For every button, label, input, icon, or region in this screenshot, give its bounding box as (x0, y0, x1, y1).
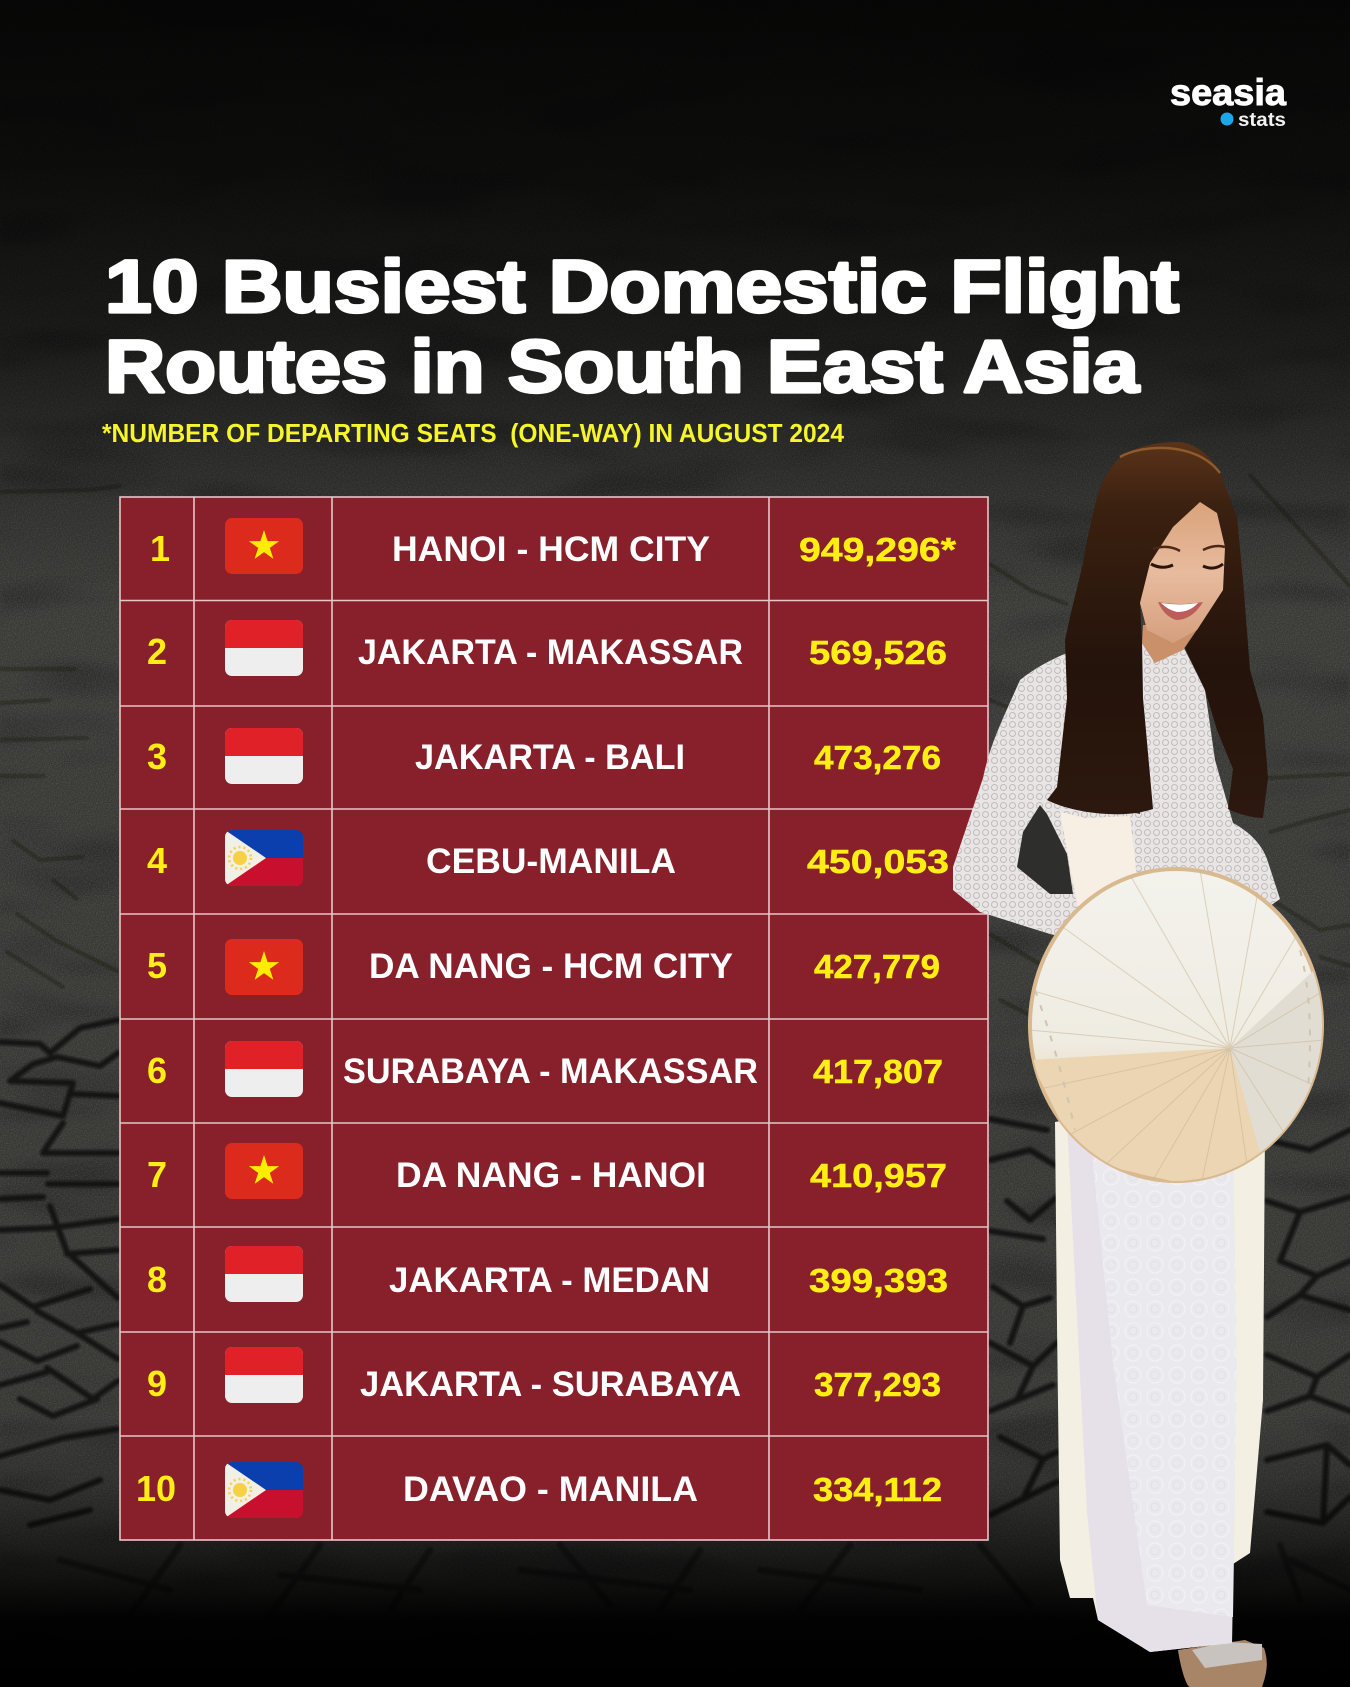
subtitle: *NUMBER OF DEPARTING SEATS (ONE-WAY) IN AUGUST 2024 (102, 420, 845, 448)
row 8: 399,393 (809, 1263, 948, 1300)
upper dress and arms (953, 640, 1280, 945)
row 1: HANOI - HCM CITY (392, 529, 710, 569)
face (1140, 502, 1225, 643)
row 10: 334,112 (813, 1472, 942, 1509)
row 6: 6 (147, 1050, 167, 1091)
row 5: 427,779 (814, 949, 940, 986)
row 5 (147, 939, 940, 995)
row 1 (150, 518, 956, 574)
hair crown highlight (1120, 448, 1220, 473)
row 2 (147, 620, 947, 676)
row 8: JAKARTA - MEDAN (389, 1260, 710, 1300)
row 7: 7 (147, 1154, 167, 1195)
table: busiest routes (120, 497, 988, 1540)
row 10: 10 (136, 1468, 176, 1509)
neck (1142, 625, 1200, 663)
row 1: 1 (150, 528, 170, 569)
row 7 (147, 1143, 947, 1199)
shoe (1178, 1640, 1267, 1687)
logo: seasia stats (1170, 72, 1286, 131)
row 4: 4 (147, 840, 167, 881)
illustration: woman in ao dai holding conical hat (953, 442, 1325, 1687)
title: Routes in South East Asia (105, 325, 1140, 408)
row 10 (136, 1462, 942, 1518)
long hair (1047, 442, 1268, 818)
row 7: DA NANG - HANOI (396, 1155, 706, 1195)
row 8 (147, 1246, 948, 1302)
row 6: SURABAYA - MAKASSAR (343, 1051, 758, 1091)
row 5: 5 (147, 945, 167, 986)
row 3: JAKARTA - BALI (415, 737, 685, 777)
row 2: 2 (147, 631, 167, 672)
row 6: 417,807 (813, 1054, 943, 1091)
row 2: JAKARTA - MAKASSAR (358, 632, 743, 672)
row 5: DA NANG - HCM CITY (369, 946, 733, 986)
row 4: 450,053 (807, 844, 949, 881)
row 3 (147, 728, 941, 784)
row 9: 9 (147, 1363, 167, 1404)
row 3: 473,276 (814, 740, 941, 777)
row 9: JAKARTA - SURABAYA (360, 1364, 741, 1404)
row 4: CEBU-MANILA (426, 841, 676, 881)
row 3: 3 (147, 736, 167, 777)
row 6 (147, 1041, 943, 1097)
conical hat (1028, 867, 1325, 1190)
row 8: 8 (147, 1259, 167, 1300)
logo: seasia stats: stats (1238, 110, 1286, 131)
row 4 (147, 830, 949, 886)
title: 10 Busiest Domestic Flight (105, 245, 1179, 328)
row 9: 377,293 (814, 1367, 941, 1404)
row 7: 410,957 (810, 1158, 947, 1195)
logo: seasia stats: seasia (1170, 72, 1286, 113)
row 1: 949,296* (799, 532, 956, 569)
row 10: DAVAO - MANILA (403, 1469, 698, 1509)
row 2: 569,526 (809, 635, 947, 672)
long dress skirt (1055, 1100, 1265, 1652)
row 9 (147, 1347, 941, 1404)
title (105, 245, 1179, 408)
